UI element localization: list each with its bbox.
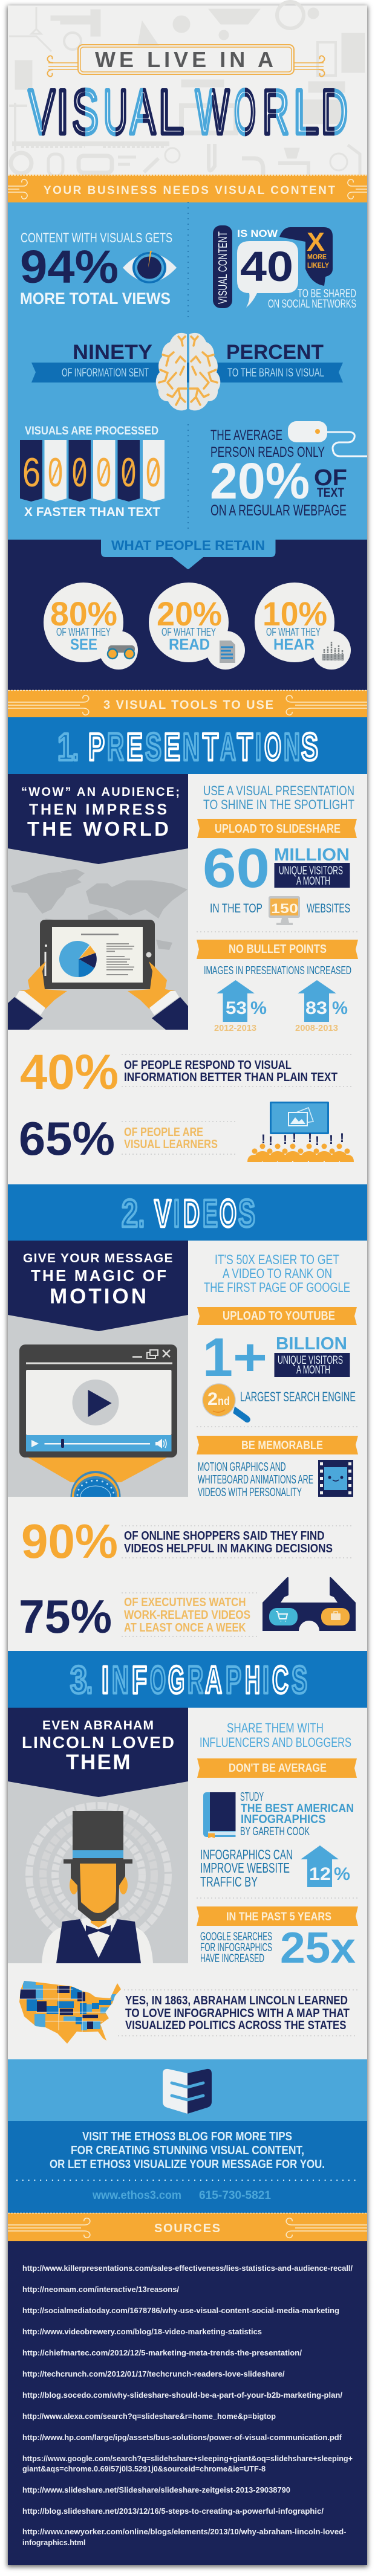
stat row: 65 percent: VISUAL LEARNERS [124,1138,218,1151]
icon: audience and screen: ! [308,1131,312,1145]
panel: video tips [197,1252,358,1499]
icon: audience and screen: ! [269,1134,273,1148]
panel: what people retain [8,538,367,691]
heading band: 2. videos: . [139,1192,145,1235]
radial rings [29,1806,168,1945]
stat: 600000 faster: 0 [121,450,136,496]
stat row: 40 percent: OF PEOPLE RESPOND TO VISUAL [124,1059,292,1072]
bubble: 80 percent see: 80% [50,595,117,633]
panel: what people retain: WHAT PEOPLE RETAIN [111,538,265,553]
stat: 600000 faster: VISUALS ARE PROCESSED [25,425,158,437]
heading band: 1. presentations: N [284,725,300,769]
panel: sources list: http://www.hp.com/large/ipg/assets/bus-solutions/power-of-visual-communication.pdf [22,2433,342,2442]
stat row: 75 percent: 75% [19,1590,112,1643]
panel: videos body background [8,1241,367,1651]
stat: ninety percent brain: TO THE BRAIN IS VISUAL [227,367,324,379]
stat: 60 million: A MONTH [296,875,330,888]
arrow stat: 12 percent [301,1845,350,1887]
stat row: 75 percent [19,1577,356,1643]
bubble: 80 percent see: SEE [70,635,97,653]
heading band: 2. videos: O [220,1192,236,1235]
panel: infographics tips: INFOGRAPHICS [241,1813,325,1826]
lincoln figure [42,1811,153,1963]
banner: your business needs visual content [8,175,367,202]
stat: 1+ billion: BILLION [276,1334,347,1354]
stat: 40x more likely to be shared: VISUAL CONTENT [217,231,230,304]
icon: mouse and cord [288,421,367,456]
banner: sources: SOURCES [154,2222,220,2235]
stat: 40x more likely to be shared: IS NOW [237,228,278,239]
panel: wow an audience heading: “WOW” AN AUDIENCE; [21,786,180,799]
panel: call to action: www.ethos3.com [92,2189,181,2202]
icon: magnifier second largest: nd [218,1395,230,1408]
ribbon: upload to slideshare [197,819,357,838]
stat: 1+ billion: A MONTH [296,1364,330,1377]
bubble: 80 percent see: OF WHAT THEY [56,626,111,638]
panel: sources list: http://www.killerpresentations.com/sales-effectiveness/lies-statistics-and-audience-recall/ [22,2264,353,2273]
badge: we live in a [47,45,325,77]
ribbon: don't be average: DON'T BE AVERAGE [229,1762,327,1775]
panel: even abraham lincoln heading: EVEN ABRAHAM [42,1719,154,1732]
icon: book [203,1792,236,1838]
heading band: 1. presentations: P [88,725,105,769]
title: visual world: W [195,77,229,147]
heading band: 1. presentations: I [255,725,261,769]
icon: ethos3 shield [163,2069,212,2114]
panel: video tips: MOTION GRAPHICS AND [198,1461,285,1474]
icon: binoculars [108,645,135,659]
text block: lincoln map fact [119,1990,357,2036]
panel: presentations tips [197,783,358,1033]
arrow stat: 83 percent: % [332,998,348,1018]
stat: 1+ billion [203,1328,350,1388]
heading band: 3. infographics: I [262,1658,269,1702]
icon: eye [123,251,177,283]
title: visual world: L [293,77,319,147]
stat row: 65 percent [19,1102,354,1165]
right hand and sleeve [128,961,188,1030]
stat: reads only 20 percent: OF [314,465,347,491]
stat: 600000 faster: 6 [22,450,41,496]
title: visual world: U [103,77,128,147]
title: visual world [28,77,348,147]
heading band: 2. videos: V [154,1192,171,1235]
panel: call to action: VISIT THE ETHOS3 BLOG FOR MORE TIPS [82,2130,292,2143]
pie chart [59,940,97,978]
stat: reads only 20 percent: TEXT [317,486,344,500]
stat: top 150 websites: IN THE TOP [210,902,262,915]
arrow stat: 12 percent: % [334,1864,350,1884]
ribbon: upload to youtube: UPLOAD TO YOUTUBE [223,1309,335,1323]
stat: 40x more likely to be shared: X [307,227,325,257]
panel: infographics tips [197,1720,358,1972]
callout [101,540,276,569]
panel: ethos3 logo [8,2059,367,2121]
stat row: 90 percent: OF ONLINE SHOPPERS SAID THEY FIND [124,1529,324,1543]
panel: even abraham lincoln heading [8,1708,188,1797]
world map [11,869,188,961]
panel: call to action: FOR CREATING STUNNING VISUAL CONTENT, [71,2144,304,2157]
banner: sources [8,2213,367,2241]
title: visual world: D [321,77,348,147]
panel: sources list [8,2241,367,2565]
panel: give your message heading [8,1241,188,1331]
panel: infographics tips: SHARE THEM WITH [227,1720,324,1735]
stat row: 90 percent [21,1514,351,1568]
panel: sources list: http://www.newyorker.com/online/blogs/elements/2013/10/why-abraham-lincoln-loved- [22,2527,346,2536]
heading band: 3. infographics: G [168,1658,184,1702]
heading band: 3. infographics: S [292,1658,307,1702]
left hand and sleeve [8,961,67,1030]
heading band: 3. infographics: R [188,1658,203,1702]
stat: ninety percent brain: NINETY [73,341,152,364]
arrow stat: 83 percent: 83 [305,998,327,1018]
panel: infographics tips: GOOGLE SEARCHES [200,1931,272,1943]
bubble: 20 percent read: 20% [157,595,222,633]
title: visual world: O [234,77,256,147]
panel: presentations illustration [8,846,188,1030]
stat: reads only 20 percent: 20% [210,453,310,509]
heading band: 1. presentations: S [145,725,161,769]
heading band: 2. videos: E [203,1192,218,1235]
icon: magnifier second largest [203,1384,249,1422]
heading band: 3. infographics: N [112,1658,129,1702]
icon: audience and screen [247,1102,354,1162]
heading band: 3. infographics: P [226,1658,241,1702]
heading band: 1. presentations [8,717,367,774]
title: visual world: R [262,77,289,147]
icon: film strip [318,1460,353,1497]
panel: presentations body background [8,774,367,1184]
title: visual world: S [72,77,99,147]
ribbon: be memorable: BE MEMORABLE [241,1439,323,1452]
panel: video tips: VIDEOS WITH PERSONALITY [198,1486,302,1499]
stat: 1+ billion: 1 [203,1328,233,1388]
decorative faint machine pattern [9,2,365,176]
panel: wow an audience heading: THE WORLD [27,818,169,840]
ribbon: in the past 5 years: IN THE PAST 5 YEARS [226,1911,331,1923]
bubble: 10 percent hear: OF WHAT THEY [266,626,321,638]
panel: sources list: http://www.slideshare.net/Slideshare/slideshare-zeitgeist-2013-29038790 [22,2485,290,2494]
heading band: 1. presentations: T [237,725,253,769]
heading band: 3. infographics: H [245,1658,260,1702]
bubble: 20 percent read: READ [169,635,210,653]
heading band: 2. videos: I [174,1192,180,1235]
panel: give your message heading: GIVE YOUR MESSAGE [23,1251,173,1265]
icon: magnifier second largest: 2 [207,1389,218,1409]
heading band: 2. videos: S [238,1192,255,1235]
panel: sources list: http://techcrunch.com/2012/01/17/techcrunch-readers-love-slideshare/ [22,2369,285,2378]
icon: audience and screen: ! [329,1133,333,1147]
stat row: 90 percent: 90% [21,1514,118,1568]
title: visual world: I [56,77,69,147]
panel: infographics tips: BY GARETH COOK [240,1825,310,1838]
stat: 40x more likely to be shared: 40 [240,243,293,290]
stat: 60 million: 60 [203,838,270,899]
panel: call to action: OR LET ETHOS3 VISUALIZE YOUR MESSAGE FOR YOU. [50,2158,325,2171]
panel: infographics tips: STUDY [240,1790,264,1804]
title: visual world: L [158,77,184,147]
video player window [19,1344,177,1457]
panel: wow an audience heading: THEN IMPRESS [29,801,167,818]
heading band: 2. videos: 2 [122,1192,138,1235]
panel: sources list: http://socialmediatoday.com/1678786/why-use-visual-content-social-media-marketing [22,2306,339,2315]
heading band: 2. videos: D [183,1192,200,1235]
panel: give your message heading: THE MAGIC OF [31,1267,166,1285]
stat: 600000 faster: X FASTER THAN TEXT [24,505,160,519]
panel: infographics tips: 25x [280,1924,356,1972]
icon: brain [156,333,220,410]
text lines [106,943,134,975]
stat row: 65 percent: OF PEOPLE ARE [124,1126,203,1139]
heading band: 1. presentations: O [264,725,281,769]
panel: sources list: http://chiefmartec.com/2012/12/5-marketing-meta-trends-the-presentation/ [22,2348,302,2357]
ribbon: in the past 5 years [197,1906,358,1926]
stat row: 75 percent: WORK-RELATED VIDEOS [124,1609,250,1622]
stat: 600000 faster: 0 [48,450,63,496]
title: visual world: A [130,77,155,147]
projector beam [26,1456,169,1482]
heading band: 3. infographics: O [150,1658,166,1702]
heading band: 3. infographics: I [102,1658,109,1702]
arrow stat: 53 percent [214,980,267,1033]
navy speech bubble [279,227,333,286]
arrow stat: 83 percent [295,980,348,1033]
icon: 3d glasses [262,1577,356,1631]
panel: even abraham lincoln heading: THEM [66,1751,131,1774]
stat: 600000 faster: 0 [96,450,111,496]
stat: reads only 20 percent: PERSON READS ONLY [210,444,325,460]
stat: 40x more likely to be shared [213,225,356,311]
icon: audience and screen: ! [261,1132,266,1146]
tablet [40,920,155,989]
stat: ninety percent brain [31,333,343,410]
stat row: 75 percent: AT LEAST ONCE A WEEK [124,1621,246,1635]
panel: give your message heading: MOTION [50,1285,146,1308]
panel: infographics body background [8,1708,367,2059]
ribbon: upload to youtube [197,1307,357,1325]
heading band: 1. presentations: E [164,725,180,769]
panel: sources list: http://blog.slideshare.net/2013/12/16/5-steps-to-creating-a-powerful-infographic/ [22,2507,324,2516]
heading band: 3. infographics [8,1651,367,1708]
panel: sources list: http://neomam.com/interactive/13reasons/ [22,2285,179,2294]
map of united states [18,1979,124,2045]
panel: header [8,2,367,176]
panel: call to action: 615-730-5821 [199,2189,271,2202]
icon: audience and screen: ! [292,1131,296,1145]
panel: wow an audience heading [8,774,188,864]
icon: document [220,641,235,663]
ribbon: be memorable [197,1436,358,1454]
panel: call to action [8,2121,367,2213]
ribbon: no bullet points: NO BULLET POINTS [229,943,327,956]
ribbon: no bullet points [197,940,358,959]
stat: 600000 faster: 0 [72,450,87,496]
title: visual world: V [28,77,55,147]
heading band: 1. presentations: . [73,725,79,769]
heading band: 1. presentations: N [183,725,200,769]
ribbon: don't be average [197,1758,357,1778]
arrow stat: 53 percent: % [250,998,267,1018]
stat: reads only 20 percent [210,421,367,519]
stat: reads only 20 percent: THE AVERAGE [210,427,282,444]
panel: infographics tips: HAVE INCREASED [200,1952,264,1965]
panel: sources list: infographics.html [22,2538,86,2547]
badge: we live in a: WE LIVE IN A [95,47,273,72]
stat: 94 percent more views: CONTENT WITH VISUALS GETS [21,230,172,245]
bubble: 10 percent hear [255,583,351,670]
heading band: 1. presentations: R [107,725,124,769]
stat: 600000 faster: 0 [146,450,161,496]
bubble: 10 percent hear: HEAR [273,635,315,653]
stat row: 90 percent: VIDEOS HELPFUL IN MAKING DECISIONS [124,1542,333,1555]
stat: 94 percent more views: MORE TOTAL VIEWS [20,289,171,308]
stat: top 150 websites: WEBSITES [307,902,350,915]
heading band: 1. presentations: S [301,725,318,769]
stat row: 40 percent [20,1045,351,1100]
heading band: 3. infographics: C [272,1658,289,1702]
panel: sources list: http://blog.socedo.com/why-slideshare-should-be-a-part-of-your-b2b-marketing-plan/ [22,2390,342,2400]
icon: projector [70,1471,121,1497]
arrow stat: 53 percent: 53 [226,998,247,1018]
heading band: 3. infographics: . [86,1658,93,1702]
bubble: 20 percent read: OF WHAT THEY [161,626,216,638]
stat: 40x more likely to be shared: LIKELY [307,261,329,270]
arrow stat: 53 percent: 2012-2013 [214,1023,256,1033]
stat row: 65 percent: 65% [19,1112,115,1165]
ribbon [31,363,343,383]
stat row: 40 percent: INFORMATION BETTER THAN PLAIN TEXT [124,1071,338,1084]
panel: infographics tips: INFOGRAPHICS CAN [200,1847,293,1862]
icon: audience and screen: ! [340,1131,344,1145]
heading band: 1. presentations: 1 [57,725,73,769]
heading band: 3. infographics: A [205,1658,222,1702]
panel: sources list: http://www.alexa.com/search?q=slideshare&r=home_home&p=bigtop [22,2412,276,2421]
heading band: 1. presentations: T [203,725,218,769]
panel: video tips: IT'S 50X EASIER TO GET [215,1252,339,1267]
heading band: 3. infographics: F [132,1658,147,1702]
stat: 94 percent more views [20,230,177,308]
panel: lincoln illustration [8,1777,188,1963]
banner: 3 visual tools to use: 3 VISUAL TOOLS TO USE [103,699,273,712]
panel: video tips: A VIDEO TO RANK ON [223,1266,332,1281]
stat: 60 million: MILLION [274,845,350,865]
ribbon: upload to slideshare: UPLOAD TO SLIDESHARE [215,822,341,836]
banner: 3 visual tools to use [8,690,367,717]
panel: video illustration [8,1311,188,1497]
icon: audience and screen: ! [315,1134,319,1148]
arrow stat: 12 percent: 12 [309,1864,331,1884]
panel: sources list: giant&aqs=chrome.0.69i57j0l3.5291j0&sourceid=chrome&ie=UTF-8 [22,2464,266,2473]
heading band: 1. presentations: E [126,725,143,769]
stat: ninety percent brain: OF INFORMATION SENT [62,367,149,379]
panel: infographics tips: THE BEST AMERICAN [241,1802,354,1815]
stat: top 150 websites [210,896,350,925]
icon: equalizer [322,642,344,660]
panel: sources list: http://www.videobrewery.com/blog/18-video-marketing-statistics [22,2327,262,2336]
banner: your business needs visual content: YOUR BUSINESS NEEDS VISUAL CONTENT [44,184,335,197]
icon: audience and screen: ! [283,1133,287,1147]
panel: infographics tips: FOR INFOGRAPHICS [200,1942,272,1954]
stat: top 150 websites: 150 [271,901,298,916]
bubble: 20 percent read [149,583,245,670]
bubble: 10 percent hear: 10% [262,595,327,633]
stat: 600000 faster [20,425,165,519]
stat: 40x more likely to be shared: MORE [307,253,327,261]
stat: ninety percent brain: PERCENT [226,341,324,364]
arrow stat: 83 percent: 2008-2013 [295,1023,338,1033]
panel: infographics tips: TRAFFIC BY [200,1874,258,1890]
stat row: 75 percent: OF EXECUTIVES WATCH [124,1596,246,1609]
heading band: 3. infographics: 3 [70,1658,87,1702]
stat: 94 percent more views: 94% [20,241,119,293]
panel: visual content statistics [8,202,367,540]
panel: infographics tips: IMPROVE WEBSITE [200,1860,290,1876]
heading band: 2. videos [8,1184,367,1241]
bubble: 80 percent see [44,583,138,670]
panel: sources list: https://www.google.com/search?q=slidehshare+sleeping+giant&oq=slidehshare+sleeping+ [22,2454,353,2463]
heading band: 1. presentations: A [220,725,236,769]
white speech bubble [237,241,298,308]
panel: even abraham lincoln heading: LINCOLN LOVED [22,1733,174,1752]
stat row: 40 percent: 40% [20,1045,119,1100]
stat: 60 million [203,838,350,899]
stat: 1+ billion: + [233,1328,267,1387]
